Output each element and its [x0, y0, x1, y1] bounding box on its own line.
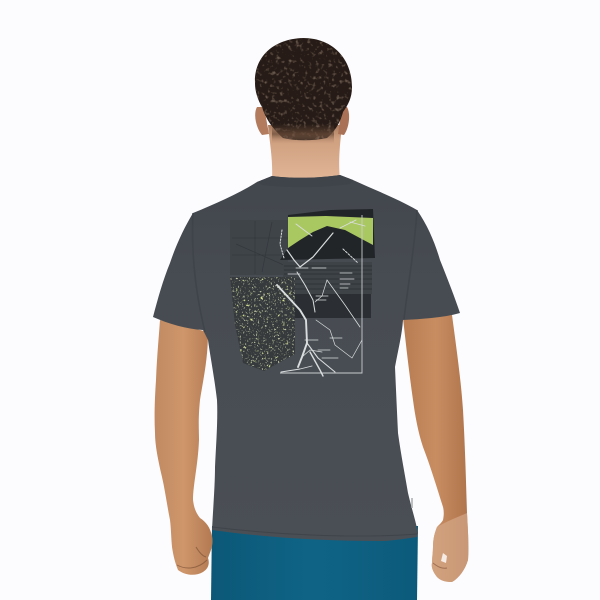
- hem: [212, 527, 417, 536]
- map print: [228, 209, 375, 376]
- rivers and roads: [277, 220, 365, 376]
- illustration: man seen from behind wearing a printed t-shirt: [153, 38, 468, 600]
- left arm: [155, 320, 213, 575]
- left hand fist: [177, 547, 207, 568]
- mountain panel with green sky: [280, 209, 375, 260]
- collar: [257, 175, 353, 187]
- sleeve seams: [193, 210, 417, 332]
- hair: [254, 38, 352, 142]
- top left faint grid panel: [230, 220, 288, 275]
- map frame: [280, 215, 362, 373]
- shorts: [211, 526, 418, 600]
- neck and ears: [255, 107, 349, 180]
- t-shirt body: [153, 175, 460, 541]
- hem label: [411, 498, 413, 508]
- right hand fist: [432, 513, 468, 582]
- middle dark stripe panel: [283, 262, 372, 318]
- speckled green terrain panel: [230, 277, 295, 371]
- right arm: [403, 315, 468, 582]
